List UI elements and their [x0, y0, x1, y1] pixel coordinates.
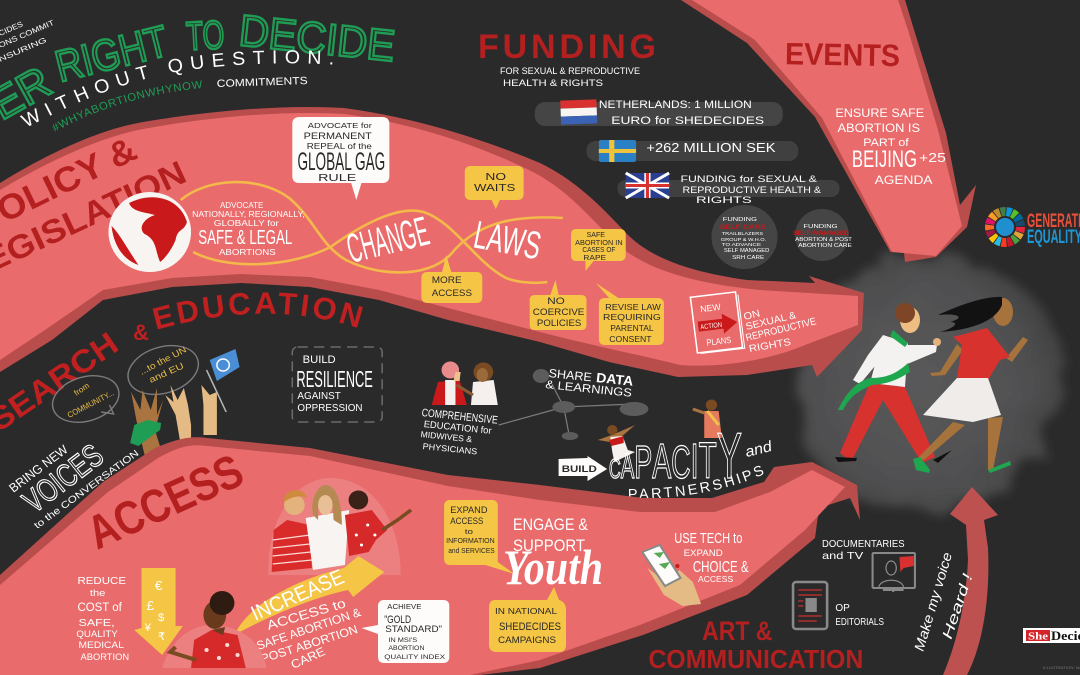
yellow bubble: more access: MORE	[432, 275, 462, 286]
text: on sexual and reproductive rights: RIGHTS	[748, 337, 792, 355]
text: funding subtitle: HEALTH & RIGHTS	[503, 78, 603, 88]
text: reduce the cost	[76, 575, 129, 662]
arrow: falling cost with currency symbols	[134, 568, 183, 655]
arrow: falling cost with currency symbols: €	[155, 578, 163, 593]
item: sweden funding: +262 MILLION SEK	[646, 141, 776, 155]
yellow bubble: no waits: NO	[485, 172, 506, 183]
yellow bubble: safe abortion in cases of rape: SAFE	[586, 231, 605, 239]
yellow bubble: no coercive policies: COERCIVE	[533, 307, 584, 317]
text: share data and learnings: DATA	[595, 370, 634, 389]
speech bubble: gold standard: ABORTION	[388, 645, 425, 652]
yellow bubble: national shedecides campaigns: IN NATIONAL	[495, 607, 558, 616]
logo: she decides: She	[1028, 632, 1048, 642]
text: reduce the cost: the	[90, 588, 105, 598]
circle: self-managed abortion funding	[793, 209, 853, 261]
text: build resilience against oppression: RESILIENCE	[296, 366, 373, 392]
speech bubble: to the UN and EU: ...to the UN	[138, 345, 188, 377]
text: comprehensive education: EDUCATION for	[423, 419, 493, 437]
heading: research and education: &	[133, 320, 149, 345]
yellow bubble: revise law requiring parental consent	[596, 283, 664, 345]
text: on sexual and reproductive rights: ON	[743, 308, 761, 323]
text: partnerships: PARTNERSHIPS	[628, 466, 764, 498]
text: beijing agenda: BEIJING	[852, 146, 917, 173]
text: build resilience against oppression: BUILD	[303, 354, 336, 366]
yellow bubble: revise law requiring parental consent: REVISE LAW	[605, 302, 662, 312]
yellow bubble: national shedecides campaigns	[489, 587, 566, 652]
panel: access band	[0, 437, 860, 675]
arrow: build	[559, 456, 607, 481]
text: bring new voices to the conversation: to the CONVERSATION	[32, 448, 141, 531]
speech bubble: global gag rule: PERMANENT	[304, 131, 372, 142]
text: bring new voices to the conversation: VOICES	[16, 437, 110, 519]
circle: self-managed abortion funding: ABORTION & POST	[795, 237, 853, 243]
illustration: three friends	[268, 478, 411, 575]
yellow bubble: safe abortion in cases of rape: RAPE	[583, 254, 606, 262]
icon: new action plans notebook: PLANS	[706, 335, 732, 348]
yellow bubble: national shedecides campaigns: CAMPAIGNS	[498, 635, 556, 646]
heading: research and education: EDUCATION	[152, 292, 363, 330]
illustration: midwife and physician	[432, 362, 498, 405]
icon: monitor with presenter	[873, 553, 915, 592]
text: reduce the cost: SAFE,	[78, 617, 115, 629]
text: build resilience against oppression	[292, 347, 382, 422]
logo: she decides	[1023, 628, 1080, 643]
speech bubble: gold standard: QUALITY INDEX	[384, 654, 446, 661]
title: her right to decide	[0, 6, 397, 145]
text: reduce the cost: QUALITY	[76, 629, 118, 639]
arrow: falling cost with currency symbols: £	[147, 598, 155, 613]
text: engage and support youth	[503, 515, 603, 595]
yellow bubble: revise law requiring parental consent: CONSENT	[609, 334, 652, 344]
yellow bubble: expand access: INFORMATION	[446, 537, 495, 545]
text: op editorials: EDITORIALS	[835, 617, 884, 628]
arrow: voice arrow	[943, 487, 998, 675]
circle: self care funding: TO ADVANCE	[722, 242, 762, 248]
circle: self care funding: SELF MANAGED	[724, 248, 770, 254]
arrow: build: BUILD	[562, 464, 597, 475]
speech bubble: gold standard: IN MSI'S	[388, 637, 418, 644]
text: access to safe abortion: CARE	[289, 644, 327, 672]
text: beijing agenda	[835, 107, 946, 187]
yellow woven ribbons	[181, 182, 563, 283]
text: access to safe abortion: SAFE ABORTION &	[255, 605, 363, 653]
yellow bubble: national shedecides campaigns: SHEDECIDES	[499, 621, 561, 633]
text: and: and	[743, 438, 774, 461]
title: her right to decide: DECIDE	[237, 6, 397, 71]
yellow bubble: expand access: and SERVICES	[448, 547, 495, 555]
circle: self care funding: SRH CARE	[732, 255, 764, 261]
icon: raised hands with un flag	[130, 349, 240, 455]
text: access to safe abortion	[255, 596, 363, 672]
text: comprehensive education: COMPREHENSIVE	[421, 407, 498, 427]
item: uk funding: REPRODUCTIVE HEALTH &	[683, 185, 822, 196]
text: share data and learnings: & LEARNINGS	[545, 378, 633, 400]
icon: new action plans notebook	[690, 292, 745, 354]
text: use tech: ACCESS	[698, 575, 734, 584]
speech bubble: gold standard: STANDARD"	[385, 624, 443, 635]
text: comprehensive education	[420, 407, 498, 457]
icon: new action plans notebook: NEW	[700, 302, 722, 314]
text: advocate safe and legal: NATIONALLY, REGIONALLY,	[192, 209, 305, 219]
text: bring new voices to the conversation: BRING NEW	[7, 443, 71, 495]
speech bubble: to the UN and EU	[121, 337, 205, 403]
arrow: increase	[234, 556, 384, 635]
text: beijing agenda: AGENDA	[875, 174, 933, 187]
heading: access: ACCESS	[79, 445, 252, 560]
heading: art and communication: ART &	[702, 615, 772, 646]
arrow: increase: INCREASE	[247, 565, 348, 625]
grey smoke cloud behind runners	[800, 255, 1064, 513]
panel: title block	[0, 6, 397, 145]
speech bubble: gold standard	[361, 600, 449, 663]
text: on sexual and reproductive rights	[743, 308, 818, 355]
text: advocate safe and legal: ABORTIONS	[219, 247, 276, 257]
text: access to safe abortion: POST ABORTION	[259, 622, 360, 666]
panel: art and communication	[648, 487, 998, 675]
icon: network of grey blobs	[499, 369, 648, 440]
text: use tech: EXPAND	[684, 548, 723, 559]
yellow bubble: revise law requiring parental consent: PARENTAL	[610, 323, 654, 333]
circle: self care funding	[711, 205, 778, 269]
text: documentaries and tv: and TV	[822, 551, 864, 562]
icon: new action plans notebook: ACTION	[700, 321, 722, 331]
text: build resilience against oppression: OPPRESSION	[297, 403, 363, 414]
yellow bubble: more access	[421, 255, 482, 303]
icon: tablet with op-ed	[793, 582, 827, 629]
text: comprehensive education: MIDWIVES &	[420, 429, 473, 444]
speech bubble: global gag rule: GLOBAL GAG	[297, 148, 385, 176]
yellow bubble: revise law requiring parental consent: REQUIRING	[603, 312, 661, 322]
text: advocate safe and legal	[192, 200, 305, 257]
speech bubble: gold standard: "GOLD	[384, 614, 411, 626]
heading: change laws: LAWS	[470, 213, 545, 268]
circle: self-managed abortion funding: ABORTION CARE	[798, 243, 852, 249]
title: her right to decide: RIGHT	[51, 17, 173, 92]
yellow bubble: safe abortion in cases of rape	[571, 229, 626, 271]
circle: self care funding: SELF CARE	[720, 224, 766, 231]
arrow: falling cost with currency symbols: ¥	[144, 622, 152, 634]
text: capacity outlined: CAPACITY	[609, 419, 742, 492]
text: intro fragment	[0, 18, 56, 64]
text: funding subtitle	[500, 66, 640, 88]
text: engage and support youth: SUPPORT	[513, 536, 585, 555]
text: beijing agenda: ABORTION IS	[837, 122, 920, 135]
panel: research and education	[0, 292, 774, 531]
subtitle: without question: WITHOUT QUESTION.	[20, 50, 332, 126]
speech bubble: global gag rule	[292, 117, 389, 200]
yellow bubble: no waits	[465, 166, 524, 209]
circle: self care funding: FUNDING	[723, 217, 757, 223]
panel: policy and legislation band	[0, 107, 864, 377]
speech bubble: from community: from	[72, 381, 91, 398]
arrow: falling cost with currency symbols: ₹	[158, 631, 165, 643]
yellow bubble: no coercive policies	[530, 280, 586, 330]
text: engage and support youth: Youth	[503, 539, 603, 595]
speech bubble: global gag rule: RULE	[318, 173, 357, 184]
panel: funding	[478, 28, 853, 269]
illustration: runner with white skirt	[913, 297, 1028, 473]
heading: research and education	[0, 292, 363, 466]
text: beijing agenda: ENSURE SAFE	[835, 107, 924, 120]
speech bubble: to the UN and EU: and EU	[147, 361, 185, 385]
heading: art and communication	[648, 615, 863, 674]
logo: generation equality	[983, 205, 1080, 249]
circle: self-managed abortion funding: FUNDING	[803, 224, 838, 230]
text: op editorials	[835, 603, 884, 628]
yellow bubble: no waits: WAITS	[474, 183, 516, 194]
text: build resilience against oppression: AGAINST	[297, 391, 341, 402]
yellow bubble: safe abortion in cases of rape: ABORTION IN	[575, 239, 623, 247]
heading: funding: FUNDING	[478, 28, 656, 66]
text: documentaries and tv	[822, 539, 905, 562]
heading: events: EVENTS	[785, 36, 900, 73]
item: sweden funding	[586, 140, 798, 162]
text: documentaries and tv: DOCUMENTARIES	[822, 539, 905, 550]
item: uk funding: FUNDING for SEXUAL &	[680, 174, 818, 185]
yellow bubble: more access: ACCESS	[432, 288, 472, 299]
text: make my voice heard: Make my voice	[911, 550, 955, 653]
text: funding subtitle: FOR SEXUAL & REPRODUCTIVE	[500, 66, 640, 76]
icon: globe	[108, 192, 191, 272]
heading: change laws	[342, 207, 545, 272]
text: advocate safe and legal: ADVOCATE	[220, 200, 264, 210]
text: make my voice heard	[911, 550, 977, 653]
title: her right to decide: TO	[185, 13, 225, 59]
text: use tech	[674, 530, 749, 584]
heading: art and communication: COMMUNICATION	[648, 644, 863, 674]
text: access to safe abortion: ACCESS to	[265, 596, 347, 633]
icon: sdg colour wheel	[983, 205, 1027, 249]
text: advocate safe and legal: GLOBALLY for	[214, 218, 279, 228]
text: bring new voices to the conversation	[7, 437, 141, 531]
text: advocate safe and legal: SAFE & LEGAL	[198, 227, 292, 249]
speech bubble: global gag rule: ADVOCATE for	[308, 121, 372, 130]
illustration: woman shrugging	[162, 591, 266, 668]
text: on sexual and reproductive rights: REPRODUCTIVE	[745, 316, 818, 344]
yellow bubble: expand access: to	[465, 528, 473, 536]
speech bubble: from community	[46, 368, 125, 430]
yellow bubble: expand access: ACCESS	[450, 516, 483, 526]
arrow: falling cost with currency symbols: $	[158, 612, 165, 624]
circle: self care funding: GROUP & W.H.O.	[721, 237, 766, 243]
text: share data and learnings: SHARE	[548, 366, 593, 384]
speech bubble: global gag rule: REPEAL of the	[307, 141, 372, 151]
text: on sexual and reproductive rights: SEXUAL &	[745, 310, 798, 333]
circle: self care funding: TRAILBLAZERS	[722, 231, 763, 236]
heading: change laws: CHANGE	[342, 207, 434, 272]
circle: self-managed abortion funding: SELF-MANAGED	[793, 230, 850, 237]
text: reduce the cost: MEDICAL	[78, 640, 124, 650]
text: reduce the cost: ABORTION	[81, 652, 129, 662]
text: engage and support youth: ENGAGE &	[513, 515, 589, 534]
speech bubble: from community: COMMUNITY...	[66, 388, 116, 420]
yellow bubble: expand access: EXPAND	[450, 505, 488, 516]
icon: hand holding phone	[642, 545, 701, 606]
text: comprehensive education: PHYSICIANS	[422, 441, 478, 457]
illustration: runner with green sash	[835, 303, 952, 463]
yellow bubble: safe abortion in cases of rape: CASES OF	[582, 246, 616, 254]
item: uk funding: RIGHTS	[696, 195, 752, 206]
yellow bubble: no coercive policies: POLICIES	[537, 318, 581, 328]
text: use tech: USE TECH to	[674, 530, 742, 547]
item: netherlands funding	[535, 99, 783, 127]
hashtag: #WHYABORTIONWHYNOW	[52, 80, 202, 132]
panel: events arrow	[681, 0, 976, 262]
item: netherlands funding: NETHERLANDS: 1 MILLION	[599, 99, 752, 111]
illustration: dancing girl	[598, 425, 635, 462]
text: make my voice heard: Heard !	[939, 572, 977, 641]
text: beijing agenda: PART of	[863, 137, 910, 149]
illustration: woman in sari	[693, 400, 722, 438]
text: use tech: CHOICE &	[693, 558, 749, 576]
text: op editorials: OP	[835, 603, 850, 614]
text: commitments: COMMITMENTS	[217, 75, 308, 90]
text: share data and learnings	[545, 366, 634, 400]
text: reduce the cost: REDUCE	[77, 575, 126, 587]
text: reduce the cost: COST of	[77, 600, 122, 614]
speech bubble: gold standard: ACHIEVE	[387, 602, 421, 611]
text: beijing agenda: +25	[919, 150, 946, 165]
item: uk funding	[617, 173, 840, 206]
yellow bubble: expand access	[444, 500, 514, 574]
yellow bubble: no coercive policies: NO	[547, 296, 565, 306]
item: netherlands funding: EURO for SHEDECIDES	[611, 115, 764, 127]
